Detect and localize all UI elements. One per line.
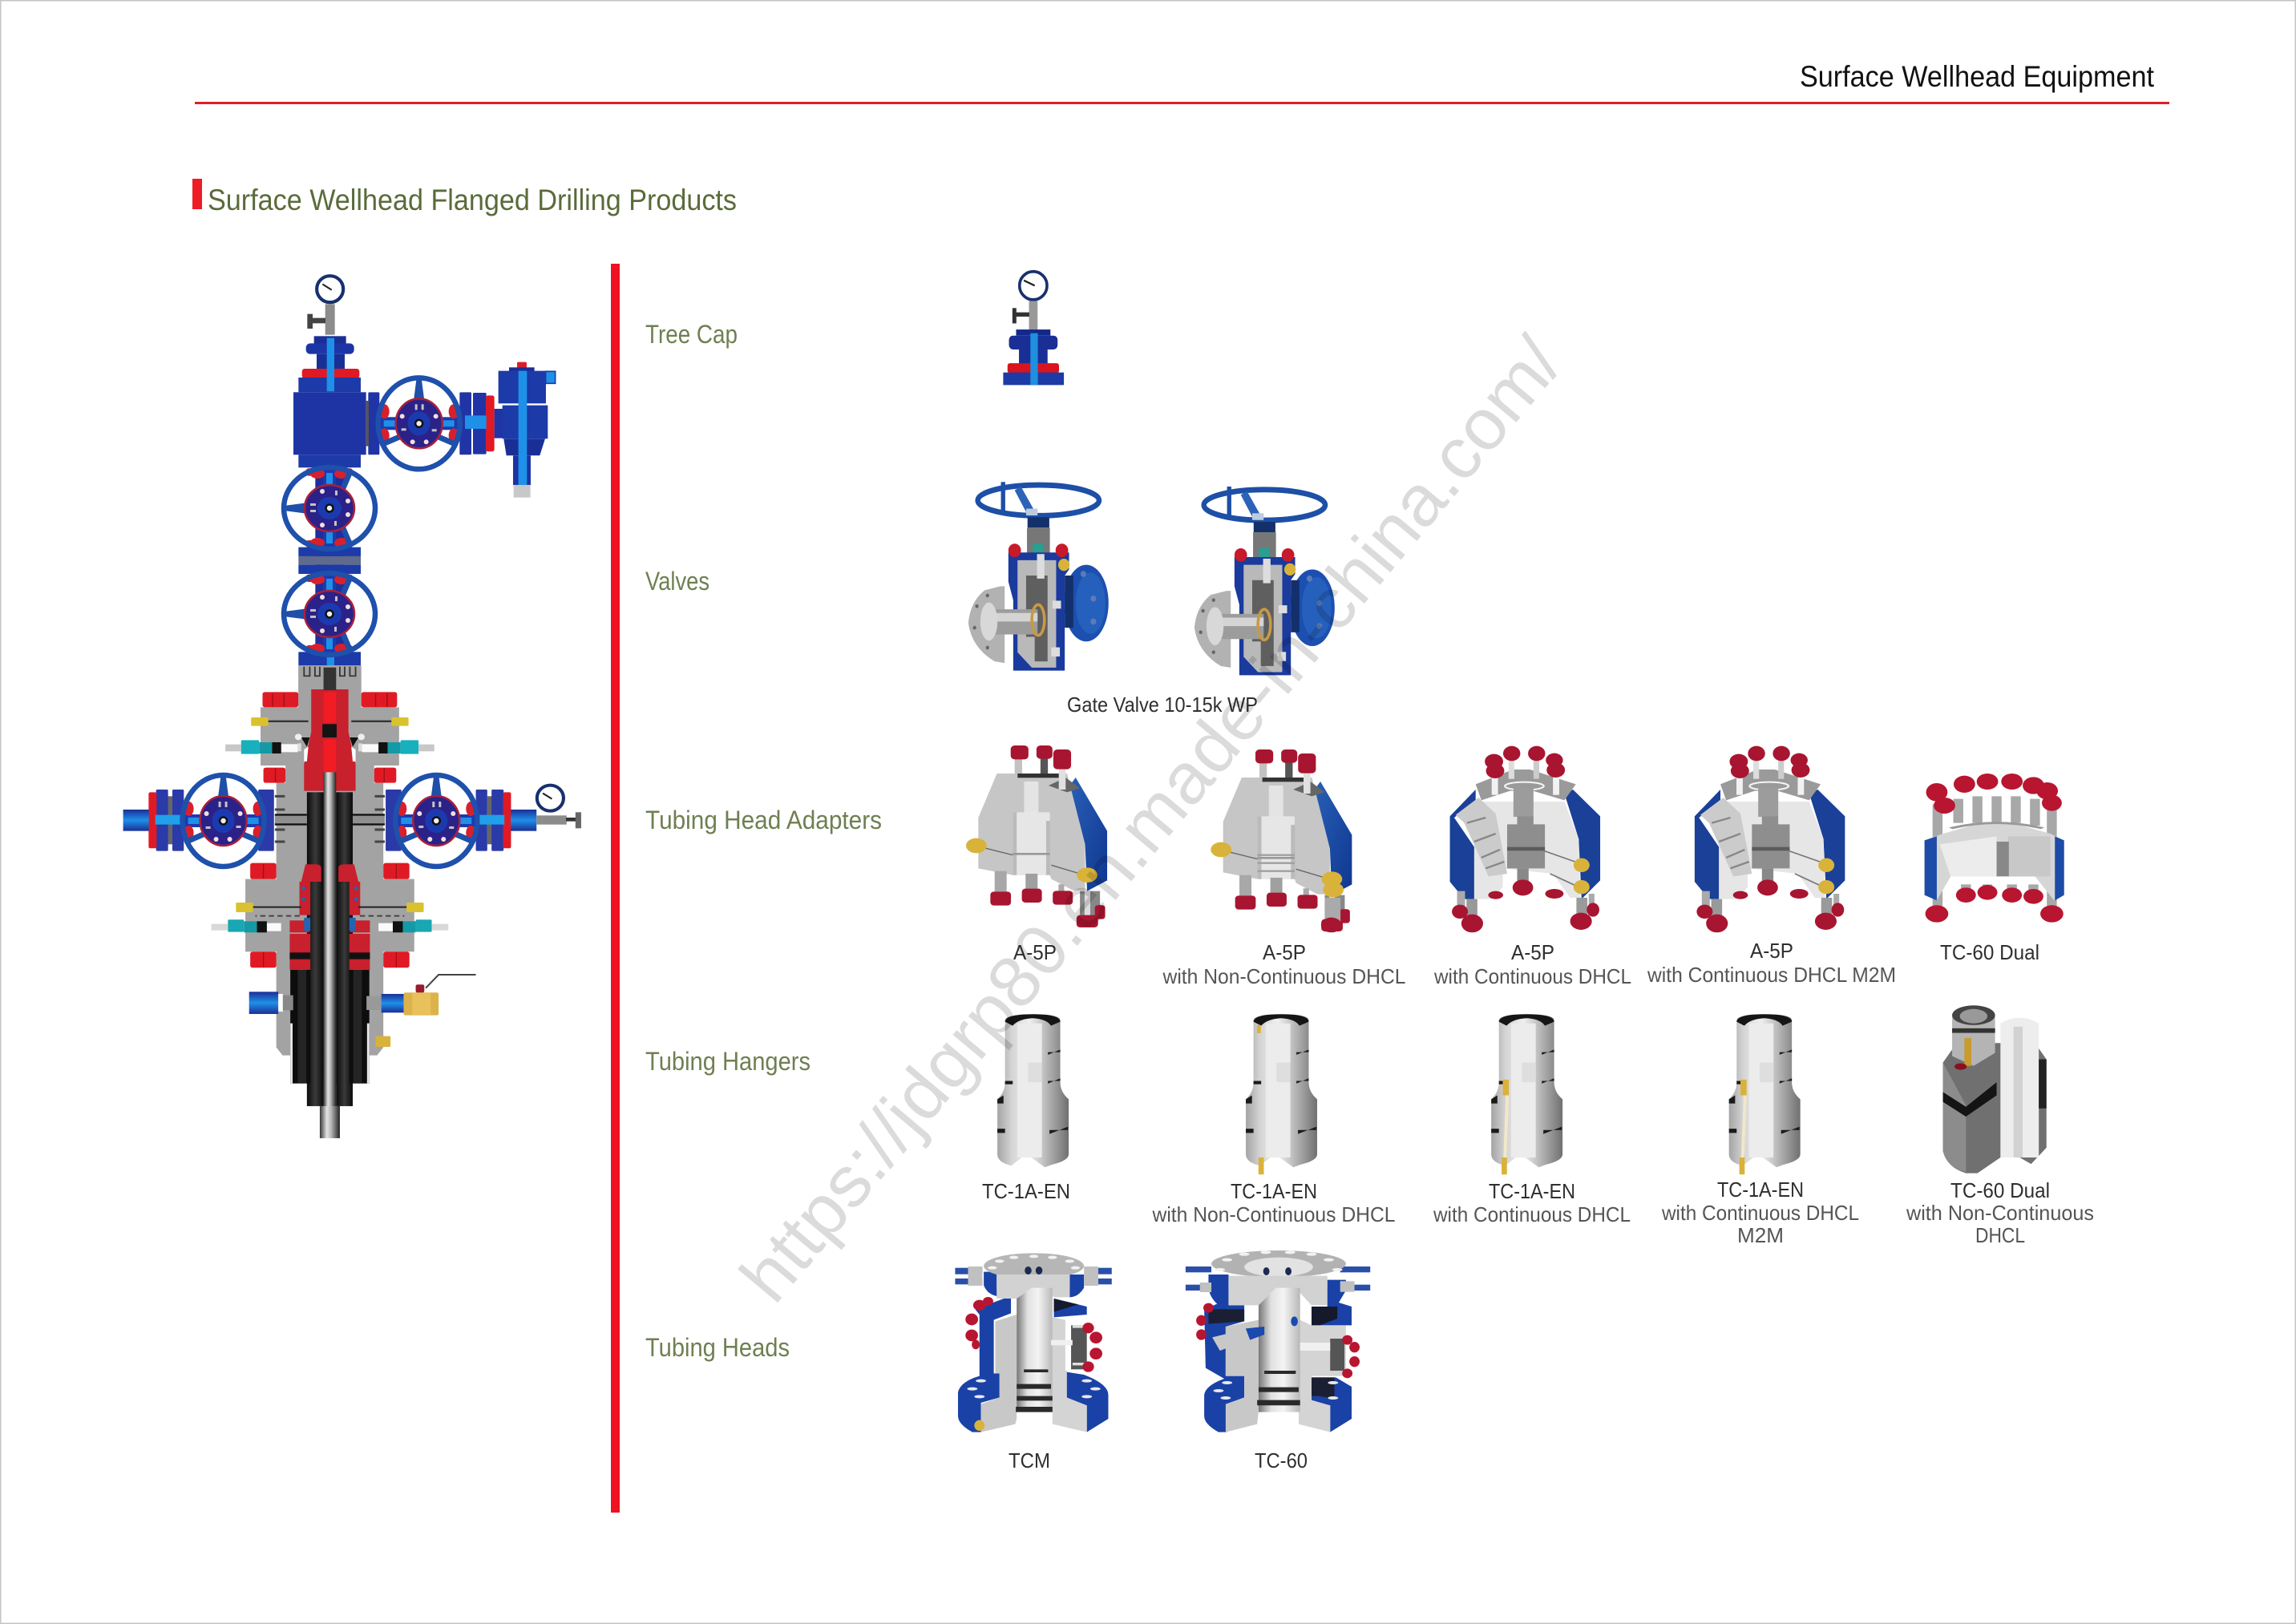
captions: tubing hangers: TC-60 Dual [1950,1178,2050,1202]
row label: Tubing Heads: Tubing Heads [645,1333,790,1362]
row label: Valves: Valves [645,567,709,596]
captions: adapters: A-5P [1511,940,1554,964]
product: adapter TC-60 dual [1925,774,2064,923]
captions: tubing hangers: with Non-Continuous DHCL [1152,1202,1395,1226]
captions: adapters: A-5P [1750,939,1793,963]
heading marker [192,179,202,209]
product: dual tubing hanger [1943,1005,2047,1174]
tree lower section: adapter, tubing head and casing head [123,665,581,1138]
row label: Tree Cap: Tree Cap [645,320,738,349]
captions: adapters: with Non-Continuous DHCL [1162,964,1406,988]
product: adapter A-5P with continuous DHCL [1450,746,1600,932]
product: tree cap [1003,272,1064,385]
tree upper section: gauge, cap, cross, master valves [284,276,556,666]
product: tubing head TC-60 [1186,1250,1370,1432]
product: tubing head TCM [955,1253,1112,1432]
product: tubing hanger with continuous DHCL M2M [1729,1014,1801,1174]
captions: tubing hangers: TC-1A-EN [1489,1179,1575,1203]
captions: tubing hangers: with Non-Continuous [1906,1201,2094,1225]
product: adapter A-5P with non-continuous DHCL [1211,749,1352,932]
vertical red divider [611,264,620,1513]
product: tubing hanger with continuous DHCL [1491,1014,1562,1174]
captions: adapters: with Continuous DHCL M2M [1647,963,1896,987]
page header title: Surface Wellhead Equipment [1800,60,2155,93]
row label: Tubing Hangers: Tubing Hangers [645,1047,810,1076]
captions: adapters: with Continuous DHCL [1433,964,1631,988]
captions: adapters: A-5P [1013,940,1057,964]
section heading [192,179,737,216]
captions: tubing hangers: with Continuous DHCL [1433,1202,1631,1226]
product: adapter A-5P [966,745,1107,927]
captions: tubing heads: TCM [1009,1448,1050,1473]
product: tubing hanger TC-1A-EN [997,1014,1069,1167]
header rule [195,102,2169,104]
captions: tubing heads [1009,1448,1308,1473]
captions: tubing hangers: DHCL [1975,1223,2025,1247]
product: tubing hanger with non-continuous DHCL [1246,1014,1317,1174]
captions: tubing heads: TC-60 [1255,1448,1308,1473]
caption: gate valve: Gate Valve 10-15k WP [1067,693,1258,717]
captions: tubing hangers: M2M [1737,1223,1784,1247]
product: gate valve 1 [968,482,1109,671]
heading text: Surface Wellhead Flanged Drilling Products [208,184,737,216]
captions: tubing hangers: TC-1A-EN [1717,1178,1804,1202]
captions: tubing hangers: TC-1A-EN [1231,1179,1317,1203]
watermark: https://jdgrp80.en.made-in-china.com/ [726,323,1578,1317]
captions: tubing hangers: with Continuous DHCL [1661,1201,1859,1225]
captions: adapters: A-5P [1263,940,1306,964]
wellhead christmas tree assembly diagram [123,276,581,1138]
product: adapter A-5P with continuous DHCL M2M [1695,746,1845,932]
row label: Tubing Head Adapters: Tubing Head Adapters [645,806,882,834]
captions: tubing hangers: TC-1A-EN [982,1179,1070,1203]
captions: adapters [1013,939,2039,988]
captions: adapters: TC-60 Dual [1940,940,2039,964]
captions: tubing hangers [982,1178,2094,1247]
product: gate valve 2 [1194,487,1335,675]
